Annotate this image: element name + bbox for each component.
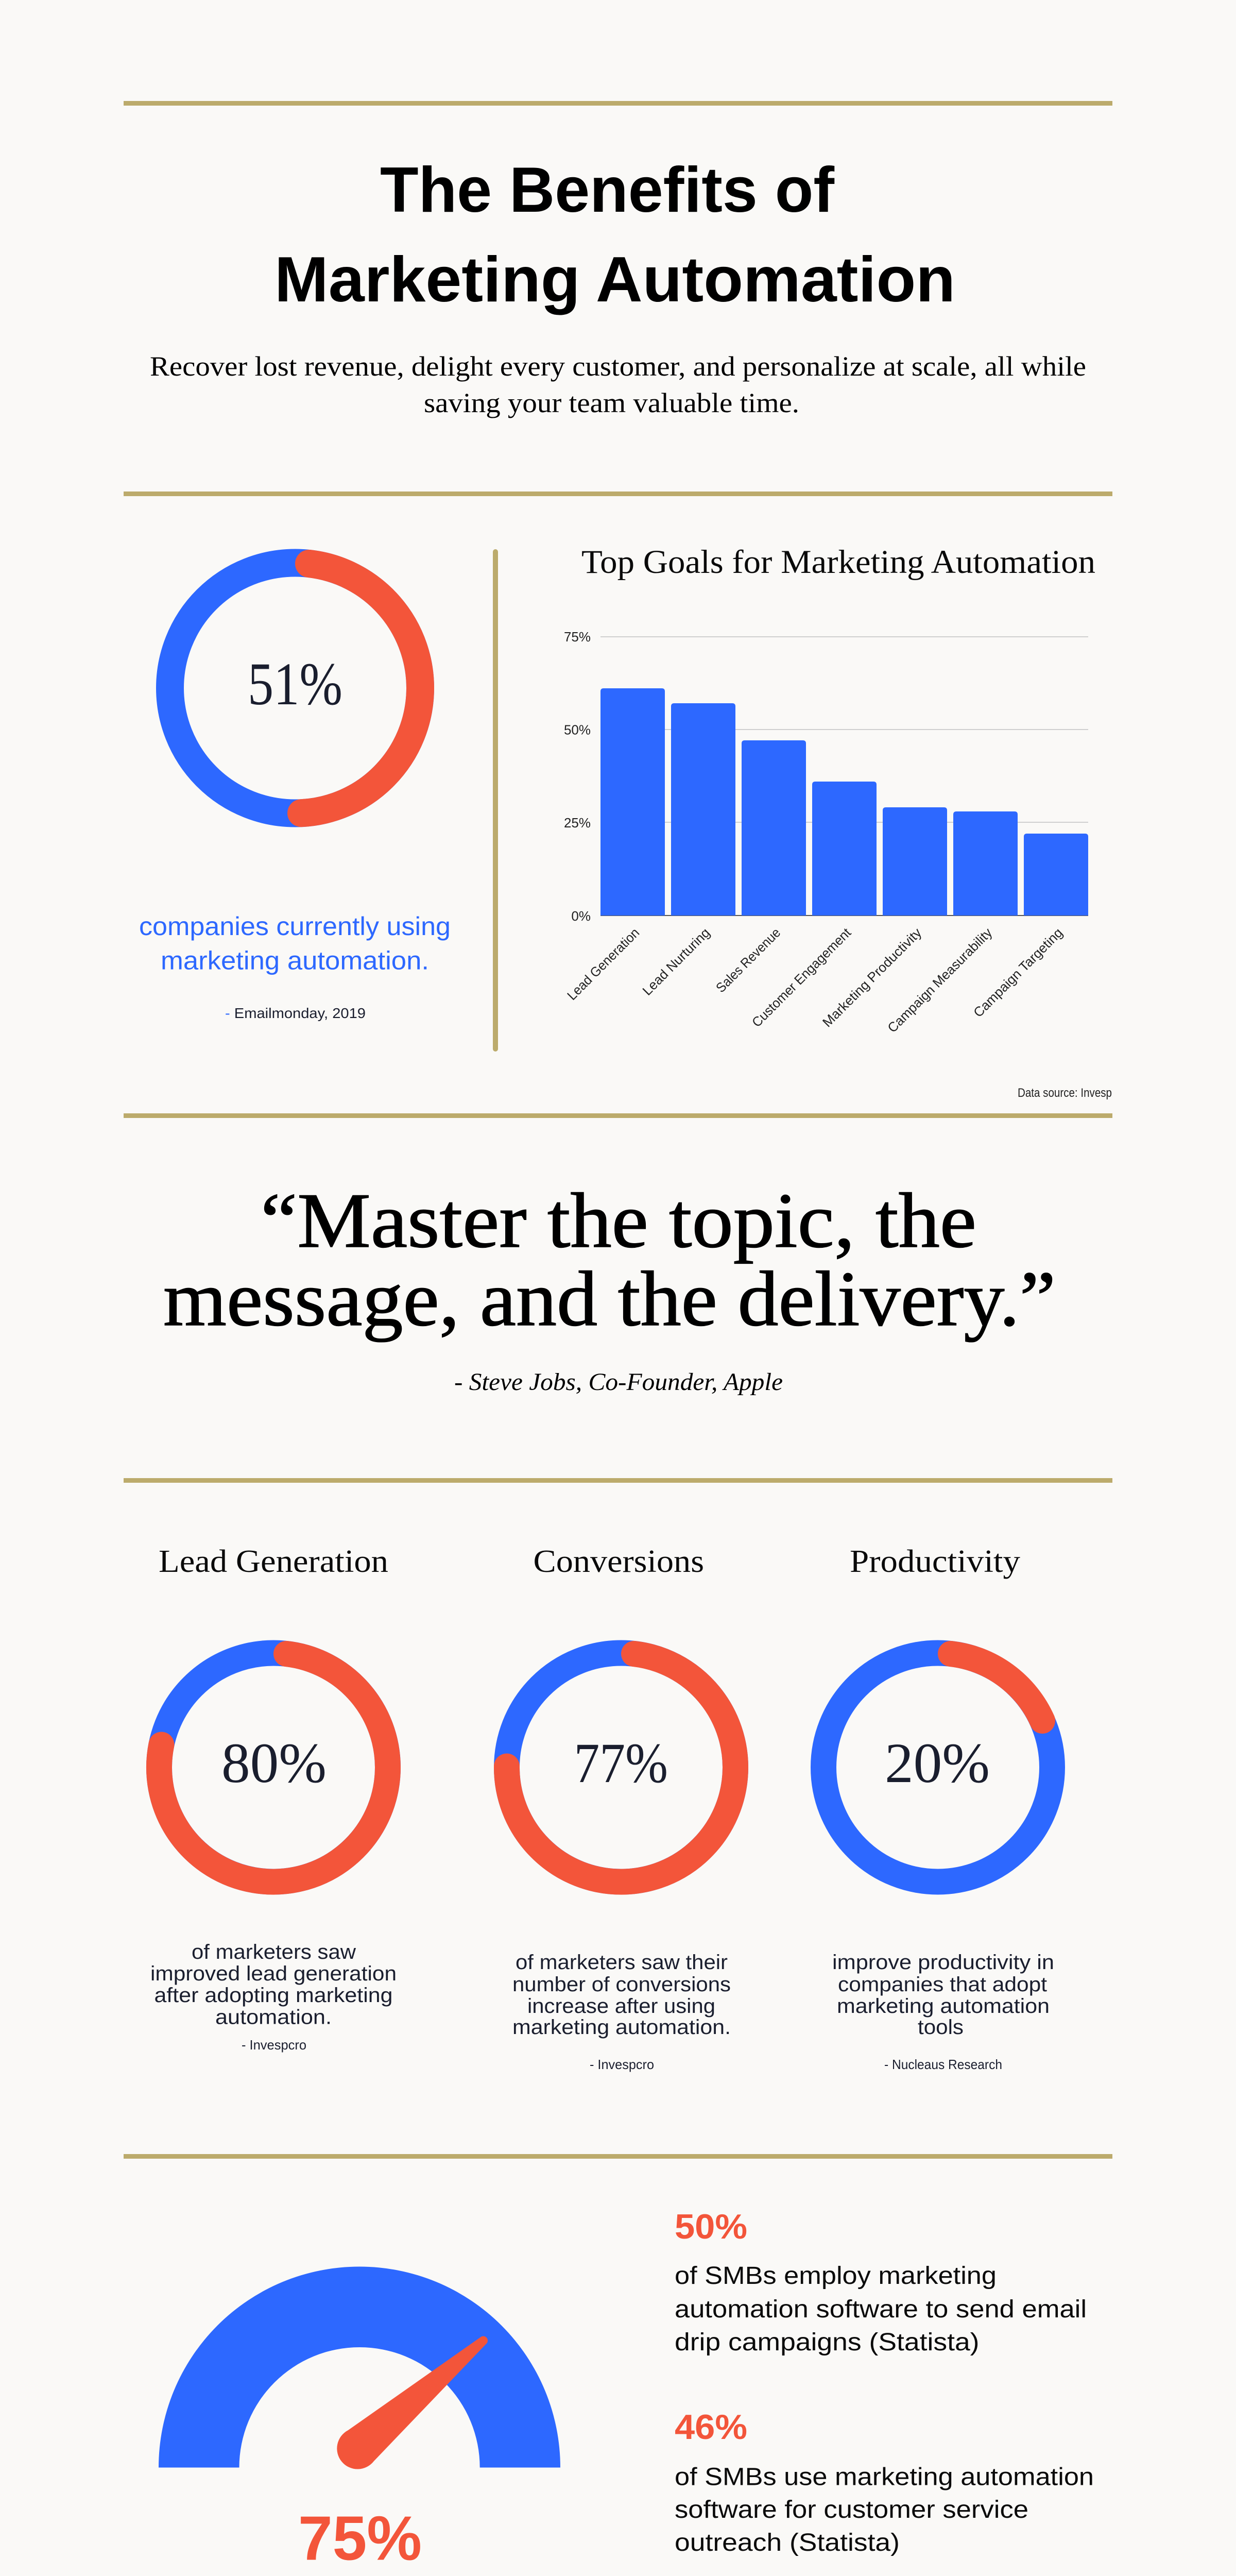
value: 77%	[574, 1732, 668, 1794]
description	[150, 1941, 397, 2029]
quote attribution: - Steve Jobs, Co-Founder, Apple	[454, 1368, 783, 1396]
description	[832, 1951, 1054, 2039]
source: - Nucleaus Research	[884, 2057, 1002, 2072]
bar chart: 0%	[571, 908, 591, 924]
description: of SMBs use marketing automation	[675, 2464, 1094, 2490]
donut value: 51%	[248, 650, 342, 718]
donut caption: marketing automation.	[161, 946, 429, 975]
panel: top goals chart	[564, 544, 1112, 1100]
gauge arc	[159, 2267, 560, 2468]
bar chart: Campaign Targeting	[970, 925, 1066, 1020]
description	[675, 2464, 1094, 2556]
description: software for customer service	[675, 2496, 1028, 2523]
bar chart: Campaign Measurability	[884, 925, 995, 1036]
description: tools	[918, 2016, 964, 2039]
description	[512, 1951, 731, 2039]
description: marketing automation	[837, 1995, 1050, 2018]
heading: Conversions	[534, 1544, 704, 1579]
panel: lead generation stat	[150, 1544, 397, 2053]
subtitle: saving your team valuable time.	[424, 387, 799, 418]
description: of SMBs employ marketing	[675, 2262, 997, 2290]
description: marketing automation.	[512, 2016, 731, 2039]
description: automation.	[215, 2006, 332, 2029]
value: 80%	[221, 1732, 327, 1794]
description: increase after using	[527, 1995, 715, 2018]
description: of marketers saw their	[516, 1951, 728, 1974]
bar chart: Sales Revenue	[713, 925, 783, 995]
bar chart: 75%	[564, 629, 591, 645]
title: Marketing Automation	[274, 244, 955, 315]
quote: message, and the delivery.”	[163, 1256, 1056, 1342]
source: - Invespcro	[242, 2037, 306, 2053]
title: The Benefits of	[380, 155, 835, 226]
panel: conversions stat	[507, 1544, 735, 2072]
description: after adopting marketing	[154, 1984, 392, 2007]
stat: 46% customer service	[675, 2408, 1094, 2556]
description: companies that adopt	[838, 1973, 1047, 1996]
description: drip campaigns (Statista)	[675, 2329, 980, 2356]
donut chart: 20%	[823, 1653, 1052, 1882]
bar chart: 50%	[564, 722, 591, 738]
donut chart: 51%	[170, 563, 420, 813]
chart data source: Data source: Invesp	[1018, 1086, 1112, 1100]
donut chart: 80%	[159, 1653, 388, 1882]
heading: Productivity	[850, 1544, 1020, 1579]
donut caption: companies currently using	[139, 912, 451, 941]
quote: “Master the topic, the	[261, 1177, 976, 1264]
description: improve productivity in	[832, 1951, 1054, 1974]
donut source: - Emailmonday, 2019	[225, 1005, 366, 1021]
panel: 51% adoption	[139, 563, 451, 1021]
value: 20%	[885, 1732, 990, 1794]
subtitle	[150, 351, 1086, 418]
description: improved lead generation	[150, 1962, 397, 1985]
donut caption	[139, 912, 451, 975]
description: outreach (Statista)	[675, 2529, 900, 2556]
bar chart: Marketing Productivity	[819, 925, 924, 1030]
percentage: 46%	[675, 2408, 747, 2447]
chart title: Top Goals for Marketing Automation	[581, 544, 1095, 581]
description: automation software to send email	[675, 2296, 1087, 2323]
gauge needle	[337, 2336, 488, 2469]
quote	[163, 1177, 1056, 1342]
donut chart: 77%	[507, 1653, 735, 1882]
bar chart: Lead Nurturing	[639, 925, 713, 998]
panel: productivity stat	[823, 1544, 1054, 2072]
subtitle: Recover lost revenue, delight every customer, and personalize at scale, all while	[150, 351, 1086, 382]
heading: Lead Generation	[159, 1544, 388, 1579]
stat: 50% email drip	[675, 2207, 1087, 2356]
bar chart: 25%	[564, 815, 591, 831]
bar chart: Lead Generation	[564, 925, 642, 1003]
description: number of conversions	[512, 1973, 731, 1996]
gauge value: 75%	[298, 2503, 422, 2573]
description: of marketers saw	[192, 1941, 356, 1963]
bar chart	[564, 629, 1088, 1036]
source: - Invespcro	[590, 2057, 654, 2072]
percentage: 50%	[675, 2207, 747, 2246]
bar chart: Customer Engagement	[749, 925, 854, 1030]
title	[274, 155, 955, 315]
description	[675, 2262, 1087, 2356]
panel: email revenue gauge	[159, 2267, 560, 2576]
